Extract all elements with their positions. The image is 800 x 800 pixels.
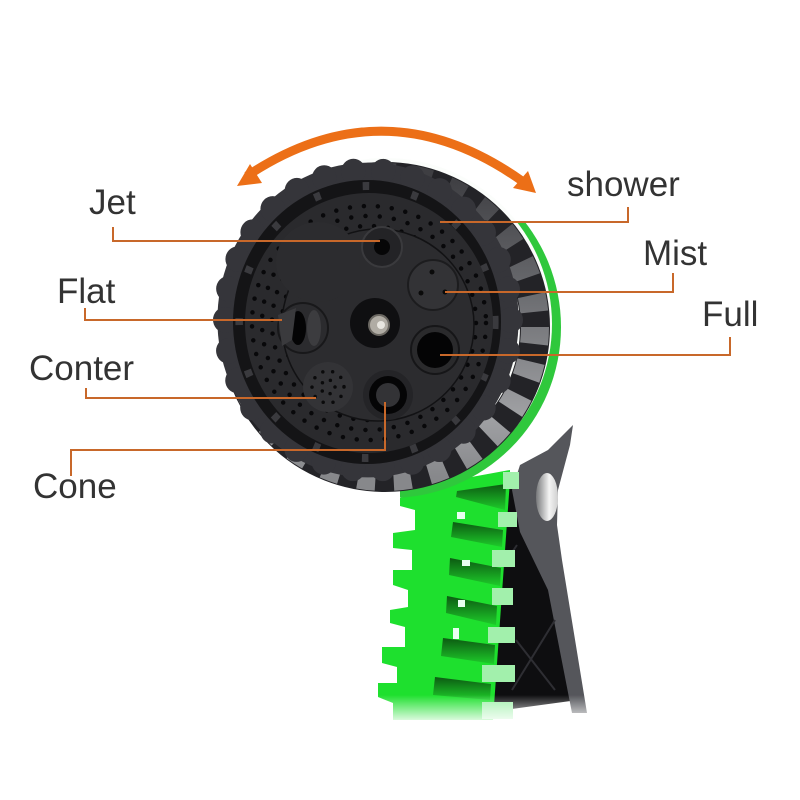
label: Cone: Cone: [33, 467, 117, 506]
left arrowhead: [237, 164, 262, 186]
rib tabs: [482, 472, 519, 719]
conter line: [86, 388, 316, 398]
handle side band: [512, 425, 587, 713]
handle interior: [490, 480, 578, 712]
arc: [247, 131, 522, 181]
flat nozzle: [278, 303, 328, 353]
label: Conter: Conter: [29, 349, 134, 388]
cone nozzle: [363, 370, 413, 420]
green hose connector: [378, 470, 519, 720]
full nozzle: [411, 326, 459, 374]
label: Flat: Flat: [57, 272, 116, 311]
shower line: [440, 207, 628, 222]
jet line: [113, 227, 380, 241]
raised lobe: [276, 222, 360, 302]
handle: dark grip behind hose: [490, 425, 587, 713]
green spine with teeth: [378, 470, 510, 720]
rib windows: [433, 484, 506, 700]
label: shower: shower: [567, 165, 680, 204]
inner plate: [282, 229, 474, 421]
jet nozzle: [362, 227, 402, 267]
flat line: [85, 308, 282, 320]
handle pivot bolt: [536, 473, 558, 521]
white ring highlight: [220, 158, 552, 490]
mist line: [445, 273, 673, 292]
nozzle dial: [217, 163, 519, 477]
cone line: [71, 402, 385, 476]
ring tabs: [239, 186, 495, 458]
handle crossed ribs: [500, 545, 555, 690]
inner black ring: [233, 180, 501, 464]
green outer ring: [400, 223, 561, 498]
leader lines: [71, 207, 730, 476]
silver ribbed ring: [235, 177, 535, 477]
rotation arrow: [237, 131, 536, 193]
full line: [440, 337, 730, 355]
conter nozzle: [303, 362, 353, 412]
screw: [369, 315, 389, 335]
label: Jet: Jet: [89, 183, 136, 222]
bottom fade: [370, 695, 600, 725]
shower holes: [252, 206, 486, 440]
center screw housing: [350, 298, 400, 348]
label: Full: Full: [702, 295, 758, 334]
mist nozzle: [408, 260, 458, 310]
scalloped outer edge: [217, 163, 519, 477]
right arrowhead: [513, 171, 536, 193]
label: Mist: Mist: [643, 234, 707, 273]
perforated plate: [245, 193, 493, 453]
hose highlights: [453, 512, 470, 639]
